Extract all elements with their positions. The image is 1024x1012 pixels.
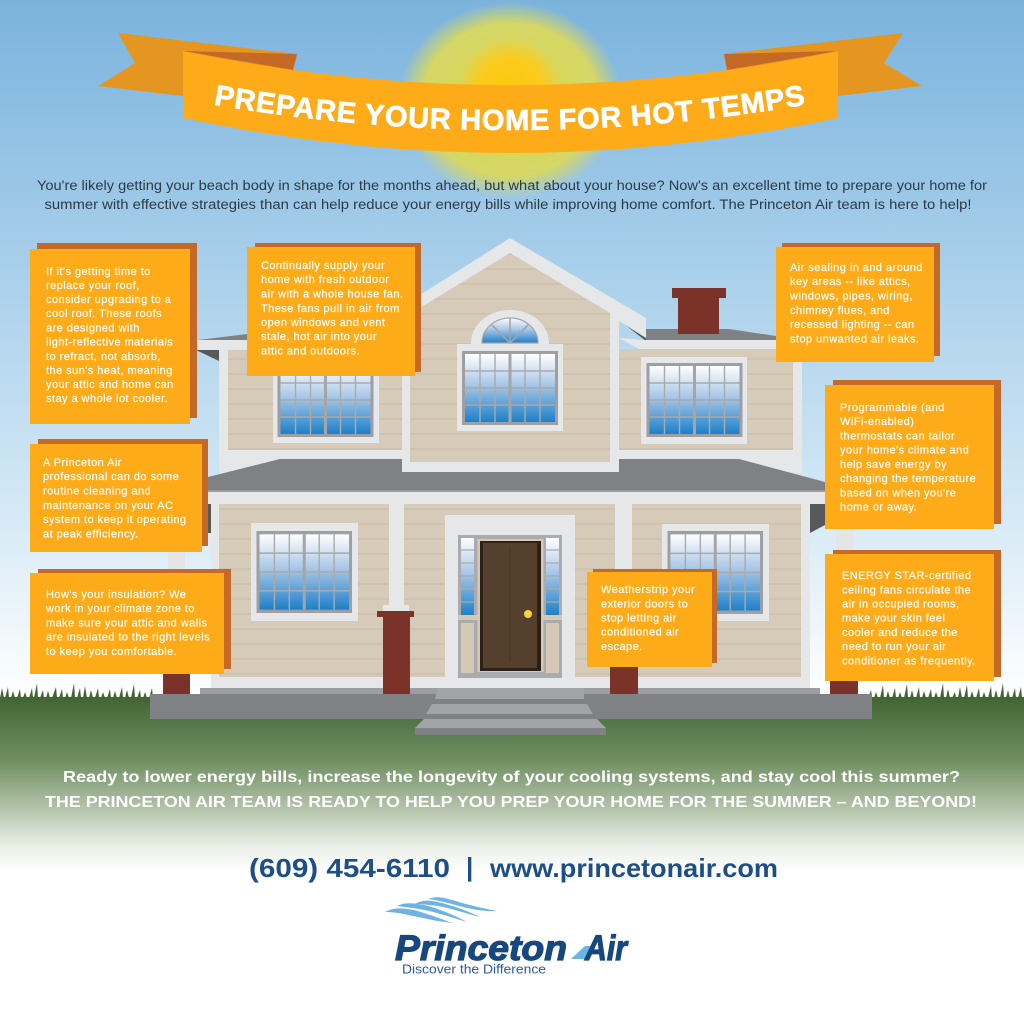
- front door: [445, 515, 575, 688]
- grass blades left: [0, 683, 153, 698]
- card: insulation: are insulated to the right levels: [46, 632, 210, 644]
- card: AC maintenance: A Princeton Air: [43, 457, 122, 469]
- card: thermostats: changing the temperature: [840, 473, 976, 485]
- grass blades right: [868, 683, 1022, 698]
- card: whole house fan: stale, hot air into your: [261, 331, 377, 343]
- call to action: THE PRINCETON AIR TEAM IS READY TO HELP YOU PREP YOUR HOME FOR THE SUMMER – AND BEYOND!: [45, 794, 977, 811]
- card: insulation: to keep you comfortable.: [46, 646, 177, 658]
- card: insulation: How's your insulation? We: [46, 589, 186, 601]
- title ribbon: [98, 33, 922, 153]
- card: AC maintenance: at peak efficiency.: [43, 528, 139, 540]
- card: ceiling fans: cooler and reduce the: [842, 627, 958, 639]
- upper windows: [273, 310, 747, 444]
- call to action: Ready to lower energy bills, increase the longevity of your cooling systems, and stay cool this summer?: [63, 769, 960, 786]
- card: cool roof: If it's getting time to: [46, 266, 151, 278]
- card: weatherstrip: Weatherstrip your: [601, 584, 695, 596]
- card: AC maintenance: system to keep it operating: [43, 514, 187, 526]
- intro text: summer with effective strategies than can help reduce your energy bills while improving home comfort. The Princeton Air team is here to help!: [44, 197, 972, 212]
- upper left window: [273, 357, 379, 443]
- porch slab and steps: [150, 688, 872, 735]
- upper left wing: [196, 334, 409, 473]
- card: whole house fan: Continually supply your: [261, 260, 385, 272]
- contact line: [249, 852, 778, 883]
- sun: [398, 2, 622, 198]
- contact line: (609) 454-6110: [249, 853, 450, 883]
- card: air sealing: windows, pipes, wiring,: [789, 290, 913, 302]
- card: insulation: [30, 569, 231, 674]
- logo A slash: [571, 946, 591, 959]
- card: weatherstrip: stop letting air: [601, 612, 677, 624]
- lower left window: [251, 523, 358, 621]
- card: insulation: make sure your attic and walls: [46, 618, 208, 630]
- card: thermostats: based on when you're: [840, 488, 956, 500]
- card: ceiling fans: make your skin feel: [842, 612, 945, 624]
- logo swoosh: [385, 897, 497, 923]
- card: whole house fan: attic and outdoors.: [261, 346, 360, 358]
- card: weatherstrip: exterior doors to: [601, 598, 688, 610]
- logo wordmark: Princeton: [395, 929, 567, 968]
- card: thermostats: [825, 380, 1001, 529]
- card: air sealing: key areas -- like attics,: [790, 276, 911, 288]
- intro text: [37, 178, 988, 212]
- card: ceiling fans: air in occupied rooms,: [842, 598, 960, 610]
- upper right wing: [612, 320, 802, 473]
- title text: PREPARE YOUR HOME FOR HOT TEMPS: [215, 84, 804, 130]
- card: air sealing: chimney flues, and: [790, 305, 890, 317]
- lower right window: [662, 524, 769, 621]
- logo Air: Air: [584, 929, 629, 968]
- card: weatherstrip: conditioned air: [601, 626, 679, 638]
- card: whole house fan: open windows and vent: [261, 317, 385, 329]
- card: ceiling fans: ceiling fans circulate the: [842, 584, 971, 596]
- upper centre window: [457, 344, 563, 431]
- lower storey: [208, 492, 825, 688]
- upper right window: [641, 357, 747, 444]
- card: cool roof: your attic and home can: [46, 379, 174, 391]
- porch roof: [208, 450, 825, 492]
- call to action: [45, 769, 977, 811]
- house: [150, 238, 872, 735]
- card: ceiling fans: ENERGY STAR-certified: [842, 570, 971, 582]
- card: weatherstrip: [587, 569, 717, 667]
- card: thermostats: Programmable (and: [840, 402, 945, 414]
- card: cool roof: [30, 243, 197, 424]
- card: whole house fan: [247, 243, 421, 376]
- card: AC maintenance: [30, 439, 208, 552]
- card: thermostats: WiFi-enabled): [840, 416, 914, 428]
- ribbon left tail: [98, 33, 297, 96]
- card: weatherstrip: escape.: [601, 641, 643, 653]
- porch soffits: [201, 504, 825, 533]
- chimney: [672, 288, 726, 334]
- ribbon folds: [183, 51, 838, 70]
- card: cool roof: light-reflective materials: [46, 336, 173, 348]
- card: thermostats: help save energy by: [840, 459, 947, 471]
- card: AC maintenance: routine cleaning and: [43, 486, 151, 498]
- card: whole house fan: home with fresh outdoor: [261, 274, 389, 286]
- card: whole house fan: These fans pull in air from: [261, 303, 400, 315]
- card: thermostats: home or away.: [840, 502, 917, 514]
- ribbon right tail: [724, 33, 922, 96]
- card: thermostats: thermostats can tailor: [840, 430, 955, 442]
- lower pillars behind cards: [168, 529, 853, 576]
- card: cool roof: stay a whole lot cooler.: [46, 393, 168, 405]
- brick column bases: [163, 611, 858, 694]
- card: AC maintenance: professional can do some: [43, 471, 179, 483]
- card: cool roof: replace your roof,: [46, 280, 140, 292]
- intro text: You're likely getting your beach body in shape for the months ahead, but what about your house? Now's an excellent time to prepare your home for: [37, 178, 988, 193]
- card: air sealing: recessed lighting -- can: [790, 319, 915, 331]
- card: whole house fan: air with a whole house fan.: [261, 288, 403, 300]
- card: ceiling fans: need to run your air: [842, 641, 946, 653]
- centre gable: [402, 238, 646, 472]
- card: air sealing: [776, 243, 940, 362]
- card: cool roof: the sun's heat, meaning: [46, 365, 173, 377]
- card: cool roof: consider upgrading to a: [46, 294, 172, 306]
- card: ceiling fans: conditioner as frequently.: [842, 656, 976, 668]
- contact line: www.princetonair.com: [489, 853, 778, 883]
- card: air sealing: Air sealing in and around: [790, 262, 923, 274]
- ribbon front: [183, 51, 838, 153]
- card: cool roof: cool roof. These roofs: [46, 308, 162, 320]
- contact line: |: [466, 852, 473, 882]
- card: cool roof: to refract, not absorb,: [46, 351, 161, 363]
- Princeton Air logo: [385, 897, 629, 976]
- card: thermostats: your home's climate and: [840, 444, 969, 456]
- sky background: [0, 0, 1024, 700]
- porch columns: [383, 504, 632, 611]
- card: AC maintenance: maintenance on your AC: [43, 500, 173, 512]
- logo tagline: Discover the Difference: [402, 962, 546, 976]
- card: cool roof: are designed with: [46, 322, 140, 334]
- arched window: [471, 310, 549, 344]
- card: air sealing: stop unwanted air leaks.: [790, 334, 919, 346]
- card: insulation: work in your climate zone to: [45, 603, 195, 615]
- card: ceiling fans: [825, 550, 1001, 681]
- ground lawn fading to white: [0, 697, 1024, 872]
